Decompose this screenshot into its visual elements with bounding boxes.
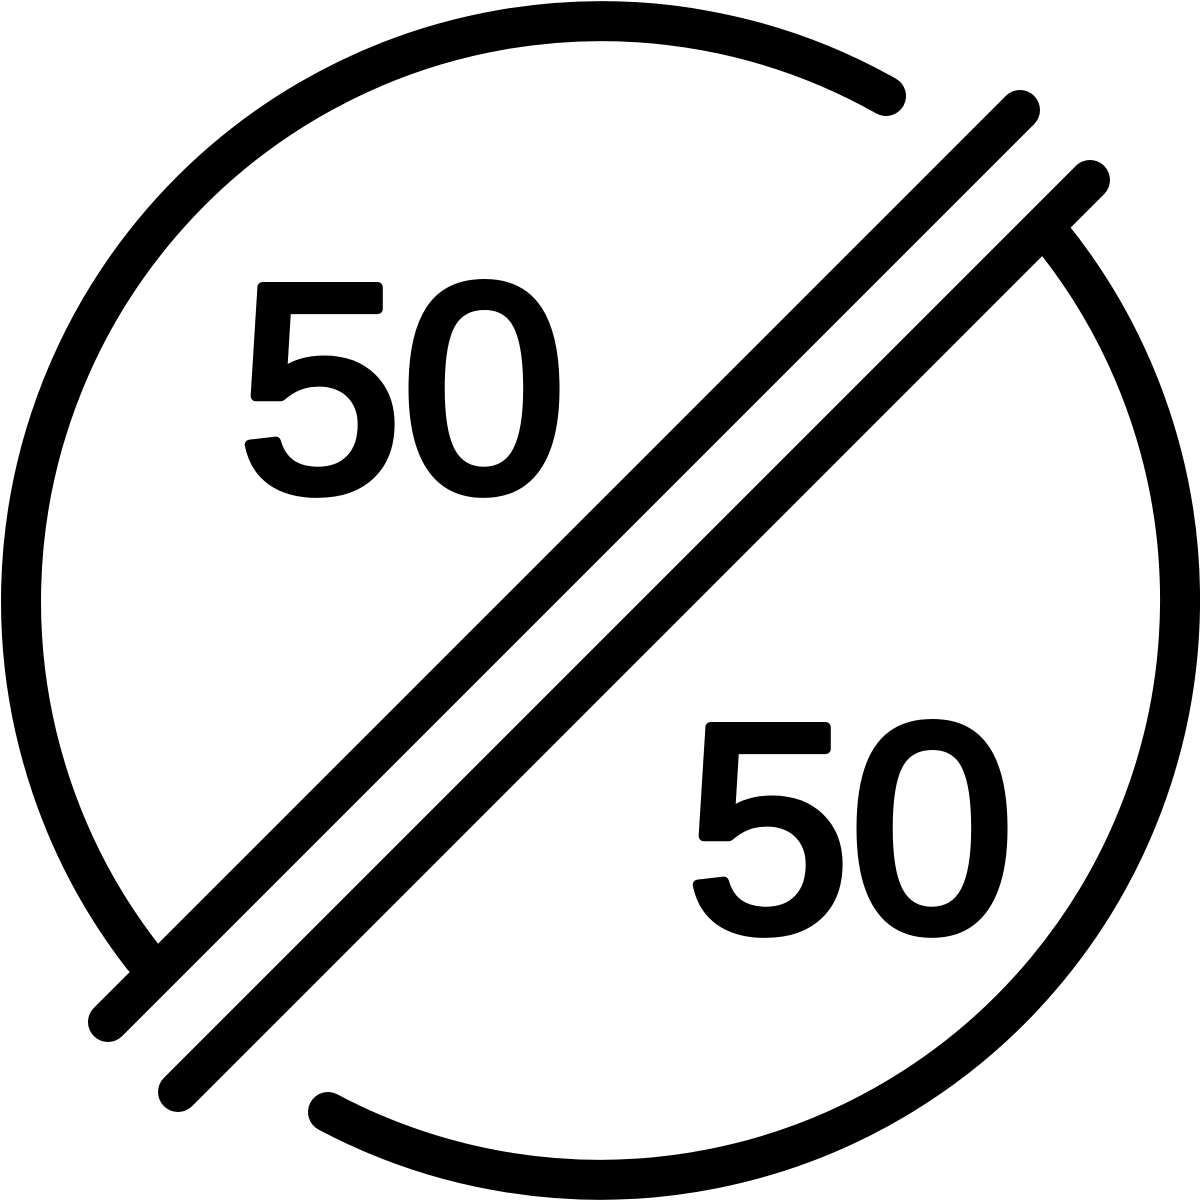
lower-right circle arc — [328, 235, 1180, 1180]
text: lower 50: 50 — [686, 663, 1014, 993]
upper-left circle arc — [21, 21, 886, 957]
text: upper 50: 50 — [238, 223, 566, 553]
diagonal line 2 — [178, 180, 1090, 1092]
diagonal line 1 — [108, 110, 1020, 1022]
